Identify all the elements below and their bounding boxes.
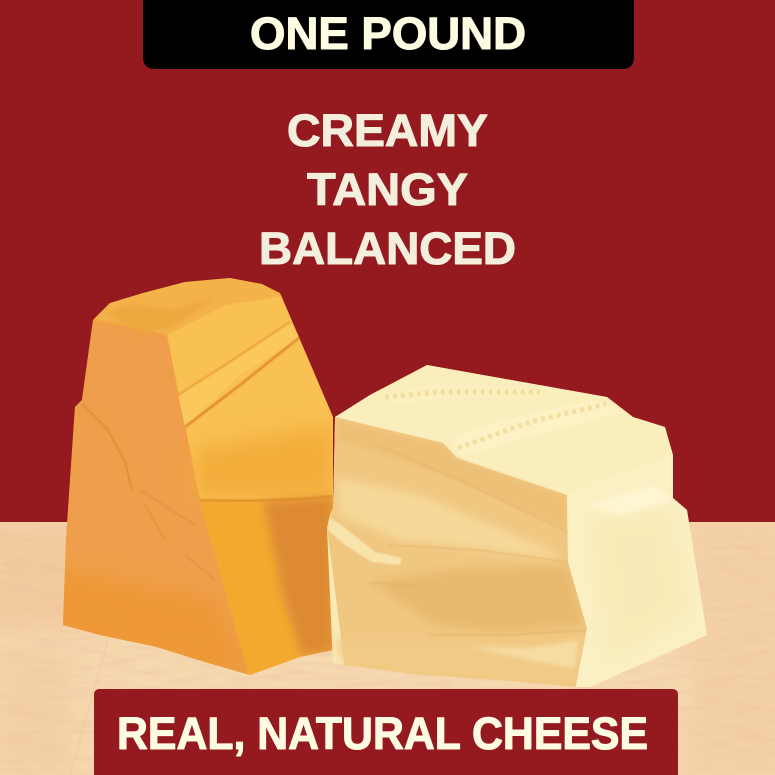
right upper face bbox=[167, 296, 333, 500]
flavor words bbox=[259, 105, 516, 274]
left face bbox=[50, 320, 250, 680]
top face bbox=[335, 365, 673, 455]
word: tangy: TANGY bbox=[307, 164, 468, 215]
background: red wall bbox=[0, 0, 775, 523]
bottom banner: real, natural cheese bbox=[94, 689, 678, 775]
fold lines bbox=[388, 486, 566, 562]
background: wooden table bbox=[0, 520, 775, 775]
banner label: ONE POUND bbox=[250, 8, 526, 59]
broken ledge bbox=[327, 515, 402, 565]
pale white cheddar block bbox=[320, 360, 715, 695]
orange cheddar block bbox=[63, 278, 333, 675]
top face bbox=[93, 278, 282, 335]
ledge line bbox=[200, 496, 333, 501]
slice grooves bbox=[178, 322, 300, 427]
right pale face bbox=[567, 455, 707, 690]
shaded lower right bbox=[264, 497, 333, 655]
word: balanced: BALANCED bbox=[259, 223, 516, 274]
bright lower band bbox=[200, 503, 302, 678]
banner label: REAL, NATURAL CHEESE bbox=[117, 708, 648, 759]
top banner: one pound bbox=[143, 0, 634, 69]
word: creamy: CREAMY bbox=[287, 105, 488, 156]
left tan face bbox=[327, 417, 587, 690]
left face scratches bbox=[82, 404, 132, 490]
